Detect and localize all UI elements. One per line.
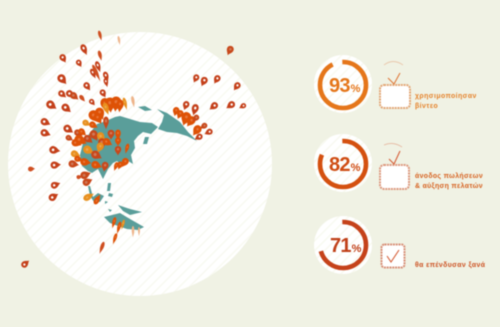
label: used video: βίντεο [415, 103, 438, 110]
label: sales and customers growth: & αύξηση πελατών [415, 182, 483, 190]
pins: east [172, 45, 247, 142]
icon: TV with check 2 [380, 143, 409, 189]
map: land masses [80, 106, 197, 230]
ring: 71% [320, 222, 366, 268]
pins: south [76, 169, 140, 255]
value: 93%: 93% [329, 75, 361, 97]
label: sales and customers growth: άνοδος πωλήσεων [415, 172, 483, 180]
globe disc [8, 32, 272, 296]
label: used video: χρησιμοποίησαν [415, 93, 477, 100]
icon: checkbox [382, 244, 404, 268]
value: 71%: 71% [330, 235, 362, 257]
pins: dense cluster over Asia [65, 96, 136, 172]
pins: north and west [20, 30, 121, 269]
icon: TV with check 1 [380, 62, 410, 108]
value: 82%: 82% [329, 154, 361, 176]
stat: 82% [314, 134, 372, 192]
label: would invest again: θα επένδυσαν ξανά [415, 262, 486, 269]
stat: 93% [314, 55, 372, 113]
stat: 71% [314, 216, 372, 274]
ring: 82% [320, 141, 366, 187]
ring: 93% [320, 62, 366, 108]
